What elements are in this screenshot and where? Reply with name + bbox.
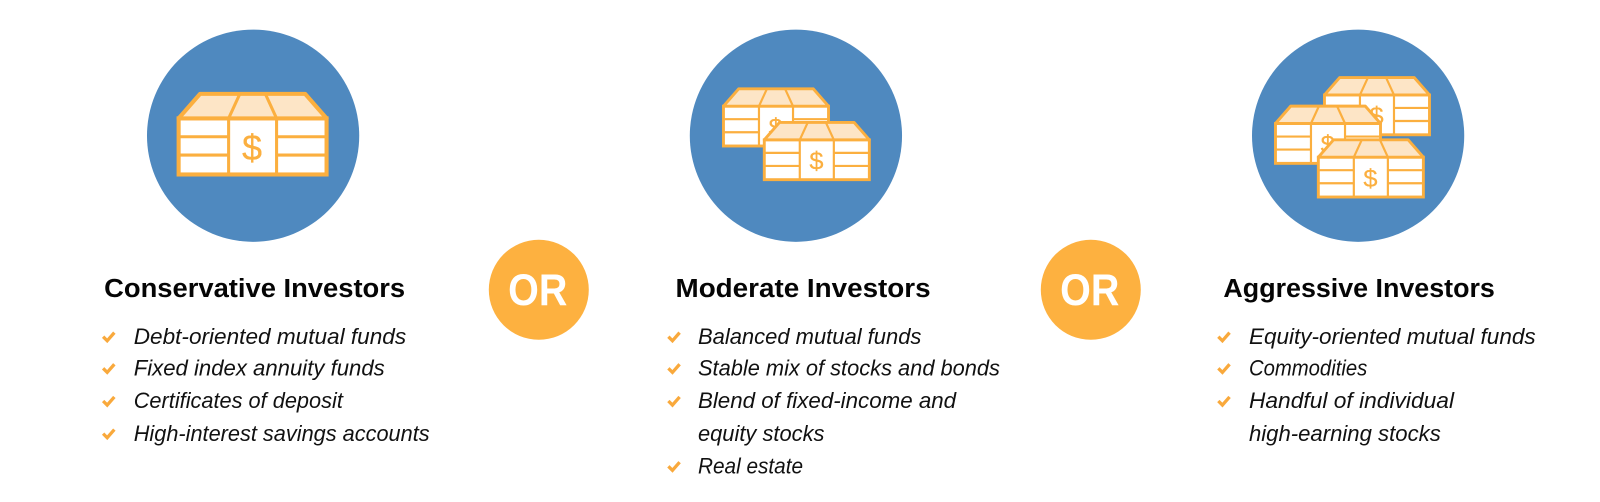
list: moderate options: Blend of fixed-income and bbox=[698, 388, 958, 413]
icon: back stack bbox=[1324, 78, 1429, 135]
icon: front stack: $ bbox=[809, 148, 824, 176]
icon: single money stack bbox=[179, 94, 327, 174]
list: moderate options bbox=[668, 324, 1000, 478]
list: aggressive options: Equity-oriented mutual funds bbox=[1249, 324, 1536, 349]
list: conservative options bbox=[103, 324, 430, 446]
list: moderate options: equity stocks bbox=[698, 421, 824, 446]
list: moderate options: Balanced mutual funds bbox=[698, 324, 921, 349]
icon: front stack bbox=[764, 122, 869, 180]
list: conservative options: Certificates of deposit bbox=[134, 388, 345, 413]
icon: single money stack: $ bbox=[242, 128, 262, 168]
badge: first OR bbox=[489, 240, 589, 340]
list: conservative options: Debt-oriented mutual funds bbox=[134, 324, 406, 349]
icon: two money stacks bbox=[723, 89, 869, 180]
circle: moderate bbox=[690, 30, 902, 242]
icon: three money stacks bbox=[1275, 78, 1429, 197]
circle: conservative bbox=[147, 30, 359, 242]
icon: middle stack: $ bbox=[1321, 131, 1335, 159]
icon: middle stack bbox=[1275, 106, 1381, 163]
panel: aggressive investors bbox=[1218, 30, 1536, 446]
list: moderate options: Real estate bbox=[698, 453, 803, 478]
heading: aggressive investors: Aggressive Investors bbox=[1223, 273, 1495, 303]
list: aggressive options: high-earning stocks bbox=[1249, 421, 1441, 446]
list: moderate options: Stable mix of stocks and bonds bbox=[698, 355, 1000, 380]
circle: aggressive bbox=[1252, 30, 1464, 242]
list: conservative options: High-interest savings accounts bbox=[134, 421, 430, 446]
badge: second OR: OR bbox=[1060, 264, 1119, 315]
badge: second OR bbox=[1041, 240, 1141, 340]
icon: back stack bbox=[723, 89, 829, 146]
panel: conservative investors bbox=[103, 30, 430, 446]
list: conservative options: Fixed index annuity funds bbox=[134, 355, 385, 380]
icon: front stack: $ bbox=[1363, 165, 1378, 193]
list: aggressive options: Commodities bbox=[1249, 355, 1367, 380]
icon: front stack bbox=[1318, 140, 1423, 197]
heading: moderate investors: Moderate Investors bbox=[676, 273, 931, 303]
list: aggressive options: Handful of individual bbox=[1249, 388, 1455, 413]
heading: conservative investors: Conservative Investors bbox=[104, 273, 405, 303]
list: aggressive options bbox=[1218, 324, 1536, 446]
icon: back stack: $ bbox=[1370, 103, 1384, 131]
badge: first OR: OR bbox=[508, 264, 567, 315]
panel: moderate investors bbox=[668, 30, 1000, 478]
icon: back stack: $ bbox=[769, 114, 783, 142]
